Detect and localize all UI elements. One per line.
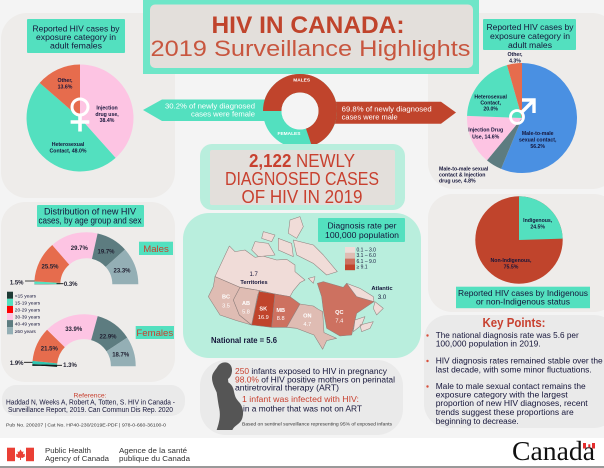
bullet: national rate <box>426 330 579 348</box>
heading: females exposure: adult females <box>50 40 102 50</box>
labels: provincial rates: 5.8 <box>242 310 250 316</box>
bullet: male to male contact <box>426 381 588 426</box>
pie chart: males exposure category: sexual contact, <box>519 138 557 144</box>
text: perinatal figures: 250 infants exposed to HIV in pregnancy <box>235 366 388 376</box>
bullet: male to male contact: trends suggest these proportions are <box>436 407 574 417</box>
text: perinatal figures: in a mother that was not on ART <box>243 404 363 414</box>
labels: males by age: 25.5% <box>41 264 59 270</box>
legend: rate bins <box>345 247 376 271</box>
pie chart: Indigenous status: Non-Indigenous, <box>491 258 532 264</box>
bullet: male to male contact: Male to male sexual contact remains the <box>436 381 586 391</box>
national rate: National rate = 5.6 <box>211 336 278 345</box>
icon: Canadian flag <box>7 448 34 461</box>
arrow: female share: cases were female <box>191 109 255 118</box>
pie chart: males exposure category: contact & Injection <box>439 173 485 179</box>
subtitle: 2019 Surveillance Highlights <box>150 36 470 61</box>
panel: total new cases: 2,122 NEWLY <box>249 150 355 171</box>
donut chart: sex split <box>272 78 328 139</box>
labels: females by age: 21.5% <box>41 346 58 352</box>
pie chart: Indigenous status <box>475 196 563 284</box>
labels: provincial rates: 1.7 <box>250 272 259 278</box>
labels: females by age: 1.9% <box>10 361 24 367</box>
bullet: national rate: The national diagnosis rate was 5.6 per <box>436 330 579 340</box>
text: perinatal figures: 1 infant was infected with HIV: <box>242 394 359 404</box>
labels: males by age: 23.3% <box>113 268 131 274</box>
pie chart: males exposure category: Use, 14.6% <box>472 134 500 140</box>
arrow: male share: 69.8% of newly diagnosed <box>342 105 432 114</box>
pie chart: females exposure category <box>27 64 133 171</box>
panel: total new cases <box>200 144 405 210</box>
half donut chart: females by age <box>45 327 123 405</box>
legend: age groups <box>7 292 41 335</box>
pie chart: males exposure category: drug use, 4.8% <box>439 178 476 184</box>
panel: reported HIV cases in adult females <box>1 13 175 198</box>
legend: age groups: <15 years <box>15 293 37 299</box>
labels: males by age <box>10 246 131 288</box>
pie chart: females exposure category: 38.4% <box>100 118 115 124</box>
panel: diagnosis rate map <box>183 213 421 358</box>
heading: key points: Key Points: <box>482 315 546 330</box>
arrow: female share <box>143 100 270 121</box>
panel: perinatal infants <box>200 360 403 435</box>
heading: females exposure: Reported HIV cases by <box>32 24 120 34</box>
footer: Public Health Agency of Canada signature: Agence de la santé <box>119 448 187 455</box>
arrow: male share <box>330 102 456 124</box>
icon: female symbol <box>71 99 89 132</box>
bullet: male to male contact: beginning to decrease. <box>436 416 519 426</box>
title: HIV IN CANADA: <box>212 12 404 39</box>
pie chart: females exposure category: drug use, <box>95 112 119 118</box>
arrow: female share: 30.2% of newly diagnosed <box>165 101 255 110</box>
labels: provincial rates: 3.0 <box>378 295 387 301</box>
heading: females exposure <box>27 19 125 53</box>
half donut chart: males by age <box>47 245 125 323</box>
panel: reported HIV cases by Indigenous status <box>428 194 604 312</box>
heading: Indigenous status: Reported HIV cases by Indigenous <box>458 288 588 298</box>
legend: rate bins: 3.1 – 6.0 <box>356 253 376 259</box>
heading: males exposure: exposure category in <box>490 31 570 41</box>
map of Canada <box>208 217 383 349</box>
panel: key points <box>424 315 604 428</box>
pie chart: Indigenous status: Indigenous, <box>523 218 553 224</box>
panel: age distribution <box>1 202 175 405</box>
heading: males exposure: adult males <box>508 40 552 50</box>
labels: provincial rates: 4.7 <box>303 322 311 328</box>
donut chart: sex split: FEMALES <box>278 131 301 137</box>
panel: reference: Surveillance Report, 2019. Can Commun Dis Rep. 2020 <box>8 407 173 414</box>
pie chart: females exposure category: 13.6% <box>58 84 73 90</box>
label: Females: Females <box>136 328 173 339</box>
Canada wordmark: Canada <box>512 436 595 466</box>
bullet: stable rates: HIV diagnosis rates remained stable over the <box>436 355 603 365</box>
pie chart: males exposure category: Male-to-male <box>522 131 554 137</box>
labels: females by age: 33.9% <box>65 327 83 333</box>
labels: females by age: 18.7% <box>112 353 130 359</box>
pie chart: males exposure category <box>439 52 577 184</box>
pie chart: Indigenous status: 24.5% <box>530 224 545 230</box>
pie chart: males exposure category: Other, <box>508 52 523 58</box>
pie chart: females exposure category: Contact, 48.0% <box>50 148 87 154</box>
panel: reported HIV cases in adult males <box>428 13 604 189</box>
heading: age distribution: cases, by age group and sex <box>38 215 142 225</box>
labels: provincial rates: SK <box>259 306 267 312</box>
bullet: male to male contact: proportion of new HIV diagnoses, recent <box>436 398 588 408</box>
pie chart: males exposure category: 4.3% <box>509 58 521 64</box>
footer: Public Health Agency of Canada signature: Agency of Canada <box>45 456 109 463</box>
labels: females by age <box>10 327 130 369</box>
legend: age groups: 20-29 years <box>15 308 41 314</box>
labels: provincial rates: 16.9 <box>258 315 269 321</box>
labels: provincial rates: QC <box>335 310 343 316</box>
labels: provincial rates: 3.5 <box>222 304 230 310</box>
panel: total new cases: OF HIV IN 2019 <box>242 186 362 207</box>
legend: rate bins: 0.1 – 3.0 <box>356 248 376 254</box>
labels: provincial rates: Territories <box>240 280 268 286</box>
label: Males <box>139 242 173 255</box>
heading: females exposure: exposure category in <box>36 32 116 42</box>
arrow: male share: cases were male <box>342 112 398 121</box>
legend: age groups: ≥50 years <box>15 329 36 335</box>
pie chart: females exposure category: Other, <box>58 78 73 84</box>
pie chart: females exposure category: Heterosexual <box>52 142 85 148</box>
footer: Public Health Agency of Canada signature <box>7 448 190 463</box>
heading: Indigenous status <box>456 287 590 308</box>
heading: diagnosis rate: Diagnosis rate per <box>328 220 397 230</box>
pie chart: females exposure category: Injection <box>96 106 118 112</box>
bullet: stable rates <box>426 355 603 375</box>
labels: provincial rates: MB <box>276 308 285 314</box>
labels: provincial rates: BC <box>222 294 230 300</box>
label: Males: Males <box>143 244 169 255</box>
labels: females by age: 1.3% <box>63 363 77 369</box>
legend: age groups: 15-19 years <box>15 300 41 306</box>
labels: provincial rates: 7.4 <box>335 319 343 325</box>
labels: females by age: 22.9% <box>99 334 117 340</box>
labels: males by age: 29.7% <box>71 246 88 252</box>
labels: provincial rates: AB <box>242 301 250 307</box>
text: perinatal figures: antiretroviral therapy (ART) <box>235 383 339 393</box>
labels: provincial rates <box>222 272 393 328</box>
icon: male symbol <box>510 100 534 124</box>
labels: males by age: 1.5% <box>10 280 24 286</box>
heading: age distribution: Distribution of new HIV <box>44 206 136 216</box>
labels: males by age: 19.7% <box>97 249 115 255</box>
footer: Public Health Agency of Canada signature: publique du Canada <box>119 456 190 463</box>
legend: rate bins: ≥ 9.1 <box>356 265 368 271</box>
panel: title banner <box>143 0 479 74</box>
heading: Indigenous status: or non-Indigenous status <box>476 296 570 306</box>
icon: pregnant woman silhouette <box>212 362 243 430</box>
labels: provincial rates: ON <box>303 314 311 320</box>
pie chart: males exposure category: 56.2% <box>530 144 545 150</box>
bullet: national rate: 100,000 population in 2019. <box>436 338 541 348</box>
footnote: sentinel surveillance: Based on sentinel surveillance representing 95% of exposed infants <box>242 422 393 427</box>
pie chart: males exposure category: Injection Drug <box>468 128 503 134</box>
legend: age groups: 30-39 years <box>15 315 41 321</box>
pie chart: Indigenous status: 75.5% <box>504 264 519 270</box>
legend: rate bins: 6.1 – 9.0 <box>356 259 376 265</box>
text: perinatal figures <box>235 366 395 414</box>
heading: males exposure <box>483 19 576 50</box>
labels: provincial rates: 8.8 <box>277 316 285 322</box>
pie chart: males exposure category: 20.0% <box>483 107 498 113</box>
pie chart: males exposure category: Heterosexual <box>474 94 508 100</box>
panel: total new cases: DIAGNOSED CASES <box>225 168 379 189</box>
pie chart: males exposure category: Male-to-male sexual <box>439 166 489 172</box>
bullet: male to male contact: exposure category with the largest <box>436 390 568 400</box>
panel: reference: Haddad N, Weeks A, Robert A, Totten, S. HIV in Canada - <box>6 400 176 406</box>
panel: reference: Reference: <box>74 392 107 399</box>
pie chart: males exposure category: Contact, <box>480 100 502 106</box>
heading: age distribution <box>37 205 144 227</box>
heading: diagnosis rate: 100,000 population <box>325 230 399 240</box>
donut chart: sex split: MALES <box>293 78 311 84</box>
labels: provincial rates: Atlantic <box>371 286 393 292</box>
panel: reference <box>2 385 185 416</box>
bullet: stable rates: last decade, with some minor fluctuations. <box>436 365 592 375</box>
footer: Public Health Agency of Canada signature: Public Health <box>45 448 91 455</box>
text: perinatal figures: 98.0% of HIV positive mothers on perinatal <box>235 374 395 384</box>
heading: diagnosis rate <box>318 218 405 242</box>
publication numbers: Pub No. 200207 | Cat No. HP40-230/2019E-PDF | 978-0-660-36100-0 <box>6 423 166 428</box>
heading: males exposure: Reported HIV cases by <box>486 22 574 32</box>
legend: age groups: 40-49 years <box>15 322 41 328</box>
labels: males by age: 0.3% <box>64 282 78 288</box>
